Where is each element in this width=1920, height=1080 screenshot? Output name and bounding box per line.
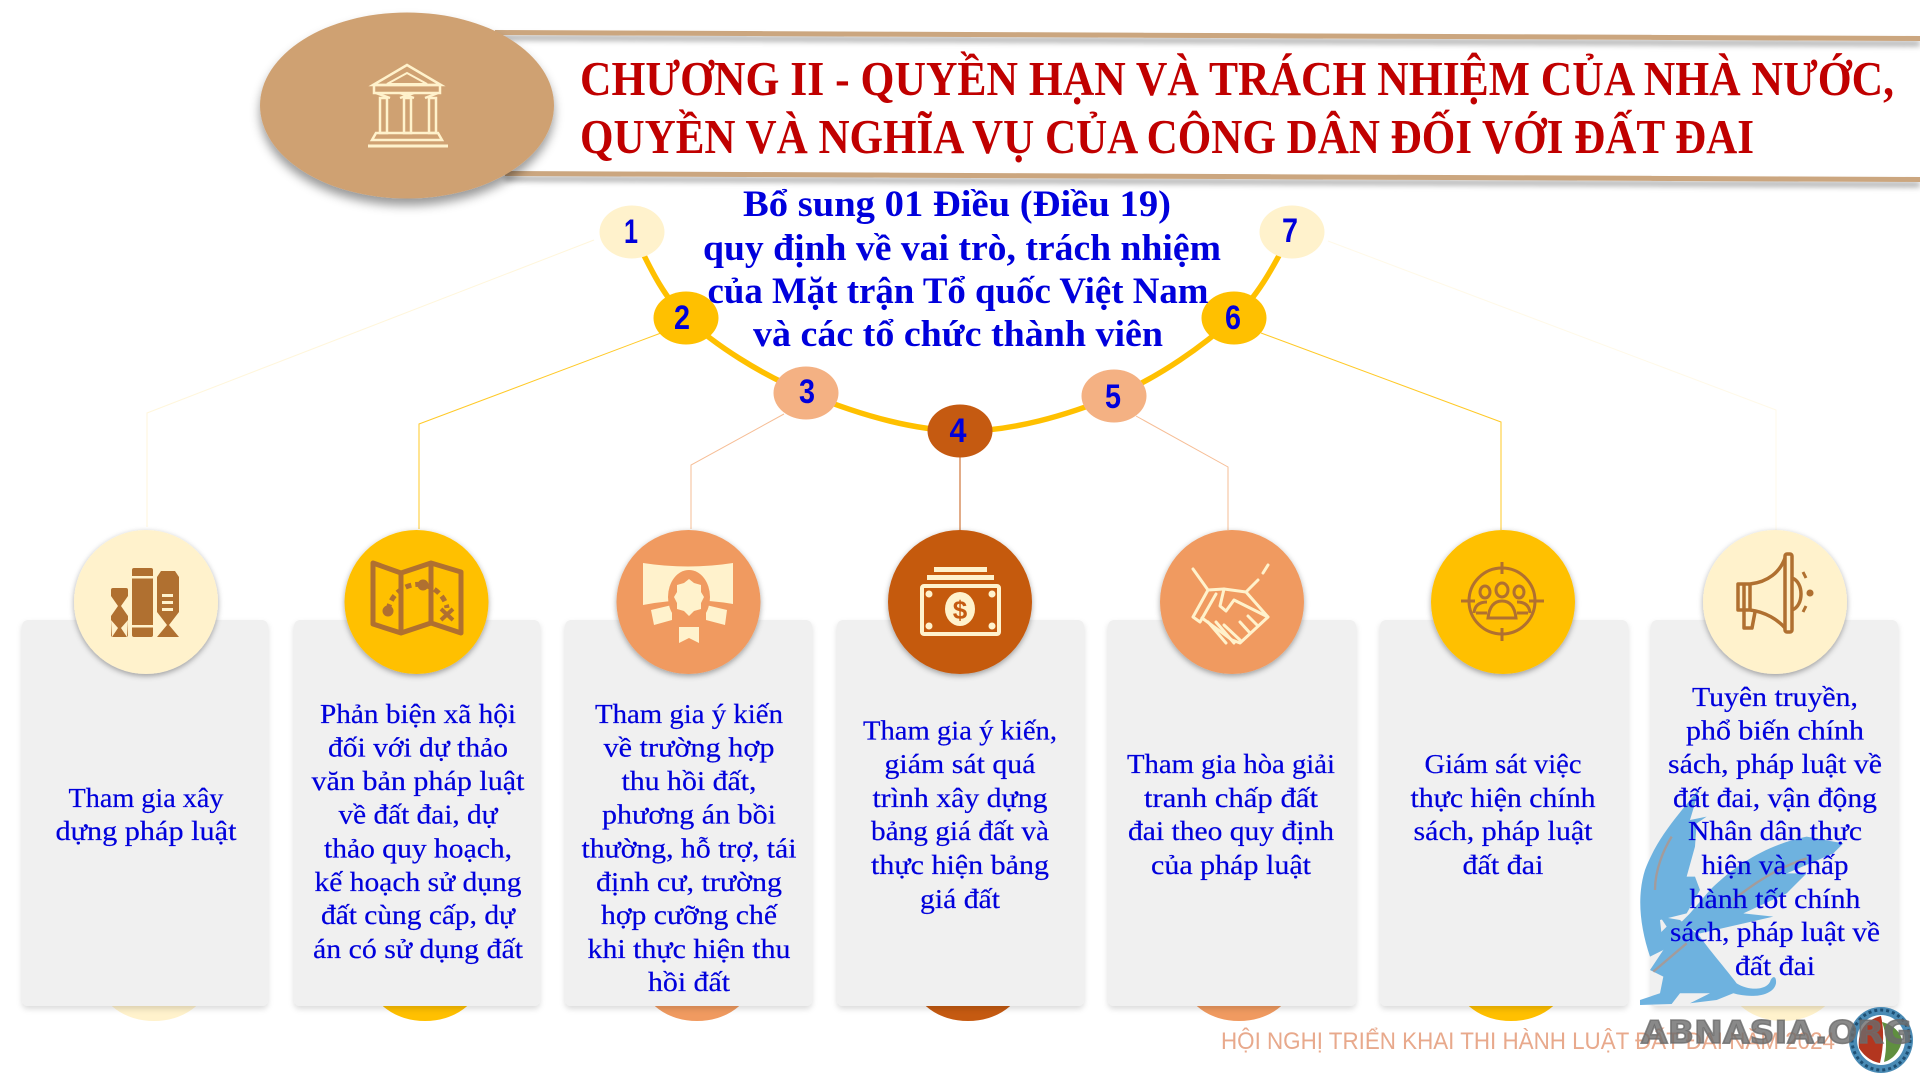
icon: megaphone	[1738, 554, 1812, 632]
header medallion	[260, 12, 554, 198]
central heading: của Mặt trận Tổ quốc Việt Nam	[708, 271, 1209, 312]
node 2: 2	[674, 299, 690, 337]
text	[1127, 749, 1335, 880]
text: đai theo quy định	[1128, 816, 1335, 846]
text: thực hiện chính	[1410, 783, 1596, 813]
icon: books	[111, 568, 179, 637]
text: Tham gia ý kiến	[595, 699, 784, 729]
node 1	[600, 206, 664, 258]
panel: column 7	[1640, 530, 1898, 1021]
panel: column 5	[1108, 530, 1356, 1021]
text: về trường hợp	[604, 732, 774, 762]
text: phương án bồi	[602, 800, 776, 830]
node 6	[1202, 292, 1266, 344]
central heading: quy định về vai trò, trách nhiệm	[703, 228, 1221, 269]
text	[56, 783, 237, 846]
text: dựng pháp luật	[56, 816, 237, 846]
text: bảng giá đất và	[871, 816, 1049, 846]
text	[863, 716, 1057, 914]
text: tranh chấp đất	[1144, 783, 1319, 813]
icon: money: $	[953, 595, 968, 625]
panel: column 2	[294, 530, 540, 1021]
node 7	[1260, 206, 1324, 258]
node 5	[1082, 370, 1146, 422]
text: Phản biện xã hội	[320, 699, 516, 729]
central heading: và các tổ chức thành viên	[753, 314, 1163, 355]
node 6: 6	[1225, 299, 1241, 337]
central heading	[703, 184, 1221, 355]
text: thường, hỗ trợ, tái	[582, 834, 796, 864]
text: Tuyên truyền,	[1692, 682, 1858, 712]
text	[1410, 749, 1596, 880]
panel: column 1	[22, 530, 268, 1021]
node 4	[928, 404, 992, 458]
text: hồi đất	[648, 967, 731, 997]
text: hiện và chấp	[1702, 850, 1848, 880]
text: của pháp luật	[1151, 850, 1312, 880]
text	[312, 699, 525, 964]
watermark: site name: ABNASIA.ORG	[1641, 1015, 1912, 1051]
panel: column 4	[837, 530, 1084, 1021]
text: sách, pháp luật về	[1670, 917, 1880, 947]
icon: temple	[368, 65, 448, 146]
watermark: logo	[1849, 1007, 1913, 1073]
text: thực hiện bảng	[871, 850, 1049, 880]
text: phổ biến chính	[1686, 716, 1865, 746]
text: Tham gia hòa giải	[1127, 749, 1335, 779]
text: đất cùng cấp, dự	[321, 900, 516, 930]
text: đất đai	[1735, 951, 1815, 981]
text: án có sử dụng đất	[313, 934, 524, 964]
text: giá đất	[920, 884, 1001, 914]
text: Giám sát việc	[1424, 749, 1582, 779]
icon: target group	[1461, 562, 1544, 641]
icon: certificate	[643, 563, 733, 643]
text: Tham gia xây	[68, 783, 224, 813]
text: về đất đai, dự	[338, 800, 499, 830]
text: trình xây dựng	[872, 783, 1048, 813]
text: hợp cưỡng chế	[601, 900, 778, 930]
text: đất đai, vận động	[1673, 783, 1877, 813]
icon: map	[373, 563, 461, 633]
icon: money	[922, 567, 999, 634]
text: Tham gia ý kiến,	[863, 716, 1057, 746]
text	[1668, 682, 1882, 981]
panel: column 3	[565, 530, 812, 1021]
header band	[495, 30, 1920, 182]
watermark: griffin	[1640, 787, 1843, 1005]
footer text: HỘI NGHỊ TRIỂN KHAI THI HÀNH LUẬT ĐẤT ĐAI NĂM 2024	[1221, 1027, 1835, 1055]
text: Nhân dân thực	[1688, 816, 1862, 846]
text: sách, pháp luật về	[1668, 749, 1882, 779]
text: thảo quy hoạch,	[324, 834, 512, 864]
text: thu hồi đất,	[622, 766, 756, 796]
node 3	[774, 366, 838, 420]
text: khi thực hiện thu	[588, 934, 791, 964]
text: hành tốt chính	[1690, 884, 1861, 914]
title: QUYỀN VÀ NGHĨA VỤ CỦA CÔNG DÂN ĐỐI VỚI ĐẤT ĐAI	[580, 109, 1754, 164]
node 1: 1	[624, 213, 638, 251]
node 7: 7	[1282, 212, 1298, 250]
text	[582, 699, 796, 997]
text: sách, pháp luật	[1414, 816, 1593, 846]
node 3: 3	[799, 373, 815, 411]
numbered nodes	[600, 206, 1324, 458]
node 2	[654, 292, 718, 344]
node 4: 4	[950, 412, 967, 450]
text: đất đai	[1462, 850, 1544, 880]
text: định cư, trường	[596, 867, 782, 897]
text: kế hoạch sử dụng	[314, 867, 522, 897]
text: đối với dự thảo	[328, 732, 508, 762]
central heading: Bổ sung 01 Điều (Điều 19)	[743, 184, 1171, 225]
panel: column 6	[1380, 530, 1628, 1021]
connector lines	[147, 240, 1776, 530]
node 5: 5	[1105, 378, 1121, 416]
text: văn bản pháp luật	[312, 766, 525, 796]
icon: handshake	[1193, 565, 1268, 643]
arc	[632, 232, 1292, 431]
title	[580, 51, 1894, 164]
text: giám sát quá	[884, 749, 1036, 779]
